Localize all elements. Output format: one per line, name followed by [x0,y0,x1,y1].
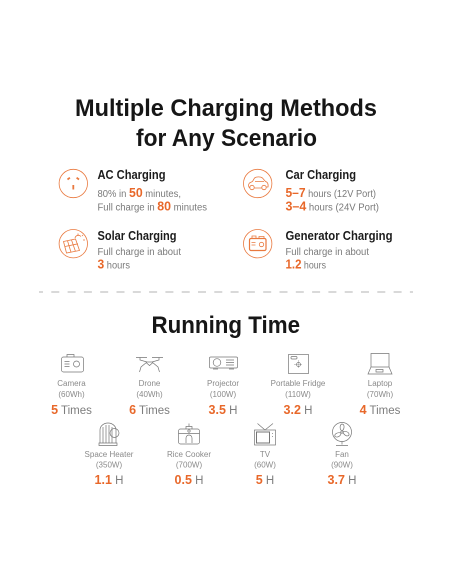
item: laptop [360,354,401,417]
icon: space heater [99,423,119,446]
item: rice cooker [167,424,211,487]
icon: solar panel [59,230,88,258]
item: portable fridge: (110W) [285,390,311,399]
item: space heater [85,423,134,487]
icon: camera [62,354,84,372]
title: charging methods: for Any Scenario [136,125,317,152]
text: car charge times: 3–4 hours (24V Port) [286,198,379,214]
icon: generator [244,230,272,258]
icon: car [244,169,272,198]
item: fan: Fan [335,450,349,459]
icon: rice cooker [178,424,200,444]
icon: laptop [368,354,392,374]
text: car charge times: 5–7 hours (12V Port) [286,185,376,200]
heading: AC Charging: AC Charging [98,168,166,182]
icon: fan [332,422,352,446]
item: projector: 3.5 H [209,403,237,417]
text: AC charge times [98,185,207,214]
item: drone: 6 Times [129,403,170,417]
item: space heater: Space Heater [85,450,134,459]
text: solar charge time: Full charge in about [98,247,181,258]
panel: AC charging [59,168,207,214]
item: camera: (60Wh) [58,390,85,399]
item: portable fridge: 3.2 H [284,403,312,417]
title: charging methods: Multiple Charging Methods [75,95,377,122]
item: laptop: (70Wh) [367,390,393,399]
item: drone [129,358,170,417]
icon: TV [254,424,276,445]
text: generator charge time: Full charge in about [286,247,369,258]
item: TV [254,424,276,487]
item: space heater: 1.1 H [95,473,123,487]
text: generator charge time: 1.2 hours [286,256,326,272]
heading: Car Charging: Car Charging [286,168,356,182]
title: charging methods [75,95,377,152]
text: generator charge time [286,247,369,272]
item: drone: Drone [139,379,161,388]
item: laptop: Laptop [368,379,393,388]
text: car charge times [286,185,379,214]
item: fan [328,422,356,487]
item: drone: (40Wh) [136,390,163,399]
item: TV: TV [260,450,271,459]
item: space heater: (350W) [96,460,122,470]
heading: Solar Charging: Solar Charging [98,229,176,243]
panel: generator charging [244,229,392,272]
item: projector: Projector [207,379,239,388]
text: solar charge time [98,247,181,272]
item: portable fridge [271,354,326,417]
item: projector [207,357,239,417]
item: camera: Camera [57,379,86,388]
text: AC charge times: 80% in 50 minutes, [98,185,181,200]
text: AC charge times: Full charge in 80 minutes [98,198,207,214]
item: rice cooker: 0.5 H [175,473,203,487]
item: camera: 5 Times [51,403,92,417]
heading: Running Time: Running Time [152,312,300,339]
item: portable fridge: Portable Fridge [271,379,326,388]
item: TV: (60W) [254,460,276,470]
item: laptop: 4 Times [360,403,401,417]
icon: fridge [288,354,308,374]
item: rice cooker: (700W) [176,460,202,470]
item: rice cooker: Rice Cooker [167,450,211,459]
icon: projector [210,357,238,369]
icon: drone [136,358,163,372]
icon: AC socket [59,169,88,198]
item: fan: (90W) [331,460,353,470]
panel: car charging [244,168,379,214]
panel: solar charging [59,229,181,272]
heading: Generator Charging: Generator Charging [286,229,392,243]
text: solar charge time: 3 hours [98,256,130,272]
item: projector: (100W) [210,390,236,399]
item: camera [51,354,92,417]
item: fan: 3.7 H [328,473,356,487]
item: TV: 5 H [256,473,274,487]
